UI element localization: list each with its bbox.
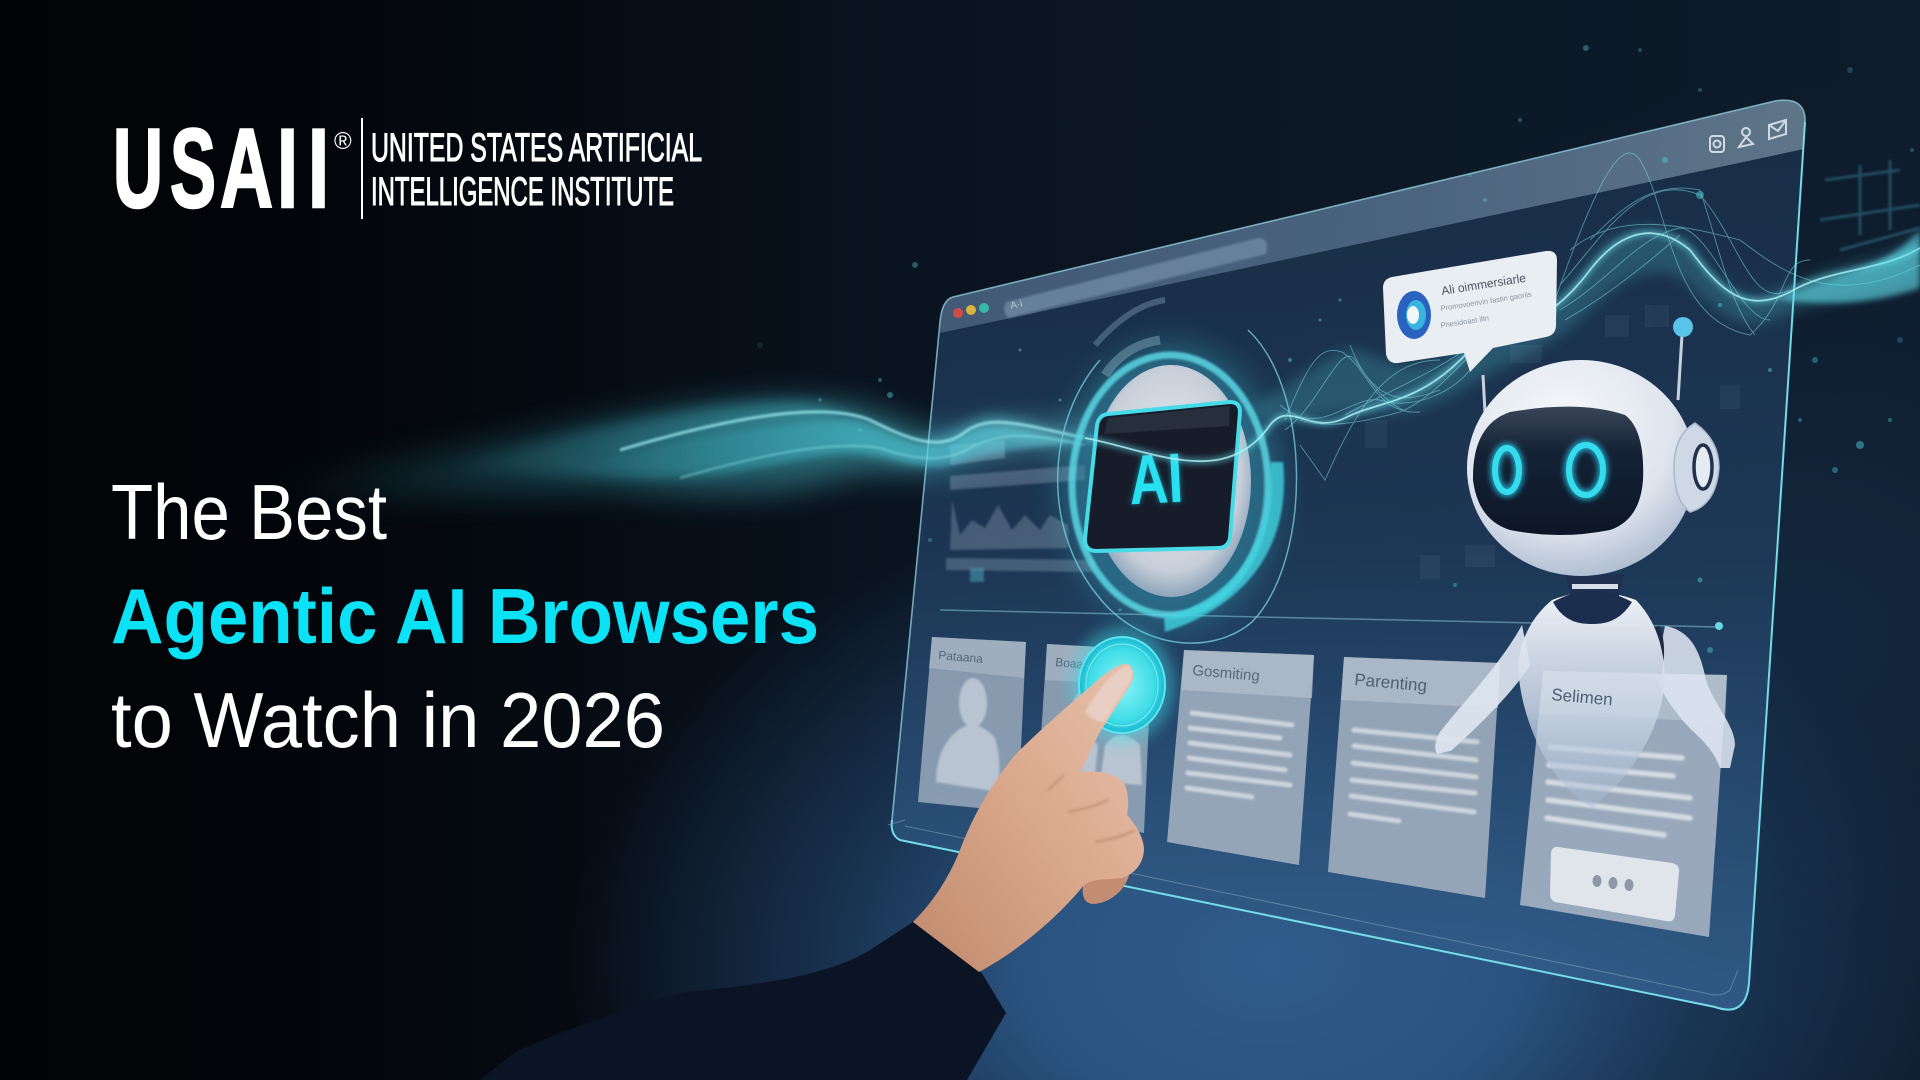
inner ring — [1072, 355, 1268, 615]
card 2: Boaantta — [1055, 655, 1104, 673]
panel outline lower — [892, 122, 1805, 1010]
robot card label: Selimen — [1551, 685, 1613, 709]
logo wordmark: A — [220, 106, 273, 231]
card 3 — [1167, 650, 1314, 865]
AI screen highlight — [1104, 406, 1230, 434]
knuckle shading — [1048, 775, 1135, 842]
panel outline upper — [892, 100, 1805, 820]
panel body — [892, 100, 1805, 1010]
bubble title: Ali oimmersiarle — [1440, 271, 1527, 298]
AI label: AI — [1127, 439, 1185, 519]
logo wordmark: I — [308, 106, 329, 231]
divider line — [940, 610, 1719, 627]
robot — [1435, 317, 1735, 807]
faint background tiles — [1365, 300, 1740, 579]
collar — [1553, 591, 1632, 624]
AI label glow: AI — [1127, 439, 1185, 519]
panel inner outline — [888, 820, 1738, 995]
thumb — [1083, 860, 1130, 904]
outer thin arc — [1058, 330, 1297, 643]
title line 3: to Watch in 2026 — [111, 676, 665, 764]
card 3: Gosmiting — [1192, 662, 1260, 685]
logo wordmark: I — [277, 106, 298, 231]
fingertip highlight — [1085, 666, 1132, 722]
glow — [1062, 345, 1278, 625]
logo name: INTELLIGENCE INSTITUTE — [371, 170, 674, 214]
eye glow — [1495, 445, 1603, 495]
visor — [1473, 407, 1643, 535]
logo name: UNITED STATES ARTIFICIAL — [371, 126, 702, 170]
wave main ribbon — [1085, 233, 1920, 461]
panel header bar — [940, 100, 1805, 333]
logo name — [371, 126, 702, 214]
silhouette — [936, 678, 999, 792]
wave body glow — [1250, 227, 1920, 422]
card 1 — [918, 637, 1026, 812]
left widget rows — [946, 440, 1095, 582]
card 3 text lines — [1187, 713, 1292, 797]
bubble icon — [1397, 291, 1431, 339]
disc — [1091, 365, 1251, 597]
bubble body text: Promovoerivin fastin gaoriis — [1440, 290, 1533, 313]
bubble body text: Phesidoast ifin — [1440, 313, 1489, 330]
antenna right — [1673, 317, 1693, 400]
right arm joint — [1656, 627, 1661, 674]
sleeve — [480, 922, 1006, 1080]
logo wordmark — [113, 106, 329, 231]
cards row — [918, 637, 1727, 937]
card 5 text lines — [1547, 747, 1690, 835]
card 4 text lines — [1350, 730, 1477, 821]
hand — [913, 664, 1144, 972]
bubble body text — [1440, 290, 1533, 330]
torso — [1518, 592, 1665, 807]
toolbar icon: mail — [1769, 120, 1786, 139]
address bar — [1004, 238, 1267, 318]
head — [1467, 360, 1695, 576]
browser window panel — [888, 100, 1805, 1010]
title line 2: Agentic AI Browsers — [111, 572, 819, 660]
particles — [757, 45, 1914, 653]
touch button — [1070, 627, 1174, 743]
silhouettes — [1060, 692, 1142, 785]
divider node — [1715, 622, 1723, 630]
logo divider — [361, 118, 363, 219]
toolbar icon: camera — [1710, 136, 1724, 152]
right circuit traces — [1820, 160, 1920, 250]
AI screen — [1085, 402, 1240, 551]
right arm — [1655, 626, 1735, 768]
address text: A·i — [1009, 299, 1024, 312]
mesh threads — [1280, 153, 1920, 480]
title line 1: The Best — [111, 468, 387, 556]
registered mark: ® — [334, 128, 352, 155]
logo wordmark: U — [113, 106, 163, 231]
upper arc segments — [1095, 300, 1165, 345]
ear — [1674, 423, 1719, 512]
window controls — [953, 303, 989, 318]
antenna left — [1483, 375, 1485, 412]
card 2 — [1036, 644, 1152, 833]
left arm — [1435, 625, 1530, 754]
data stream: left smoke wave — [250, 402, 1090, 500]
title — [111, 468, 819, 764]
speech bubble — [1383, 251, 1557, 372]
ellipsis button — [1550, 847, 1679, 921]
toolbar icon: person — [1739, 128, 1753, 147]
eyes — [1495, 445, 1603, 495]
card 1: Pataana — [938, 648, 984, 666]
right ribbon — [1780, 230, 1920, 303]
neck — [1565, 574, 1624, 600]
card 5 — [1520, 671, 1727, 937]
logo: USAII — [113, 106, 702, 231]
logo wordmark: S — [170, 106, 216, 231]
hand with sleeve — [480, 664, 1144, 1080]
AI orb — [1058, 300, 1297, 643]
ellipsis dots — [1592, 875, 1634, 891]
lower cyan crescent — [1164, 462, 1284, 632]
card 4 — [1328, 657, 1500, 898]
data wave: mesh to upper right — [1085, 153, 1920, 480]
card 4: Parenting — [1354, 670, 1428, 695]
